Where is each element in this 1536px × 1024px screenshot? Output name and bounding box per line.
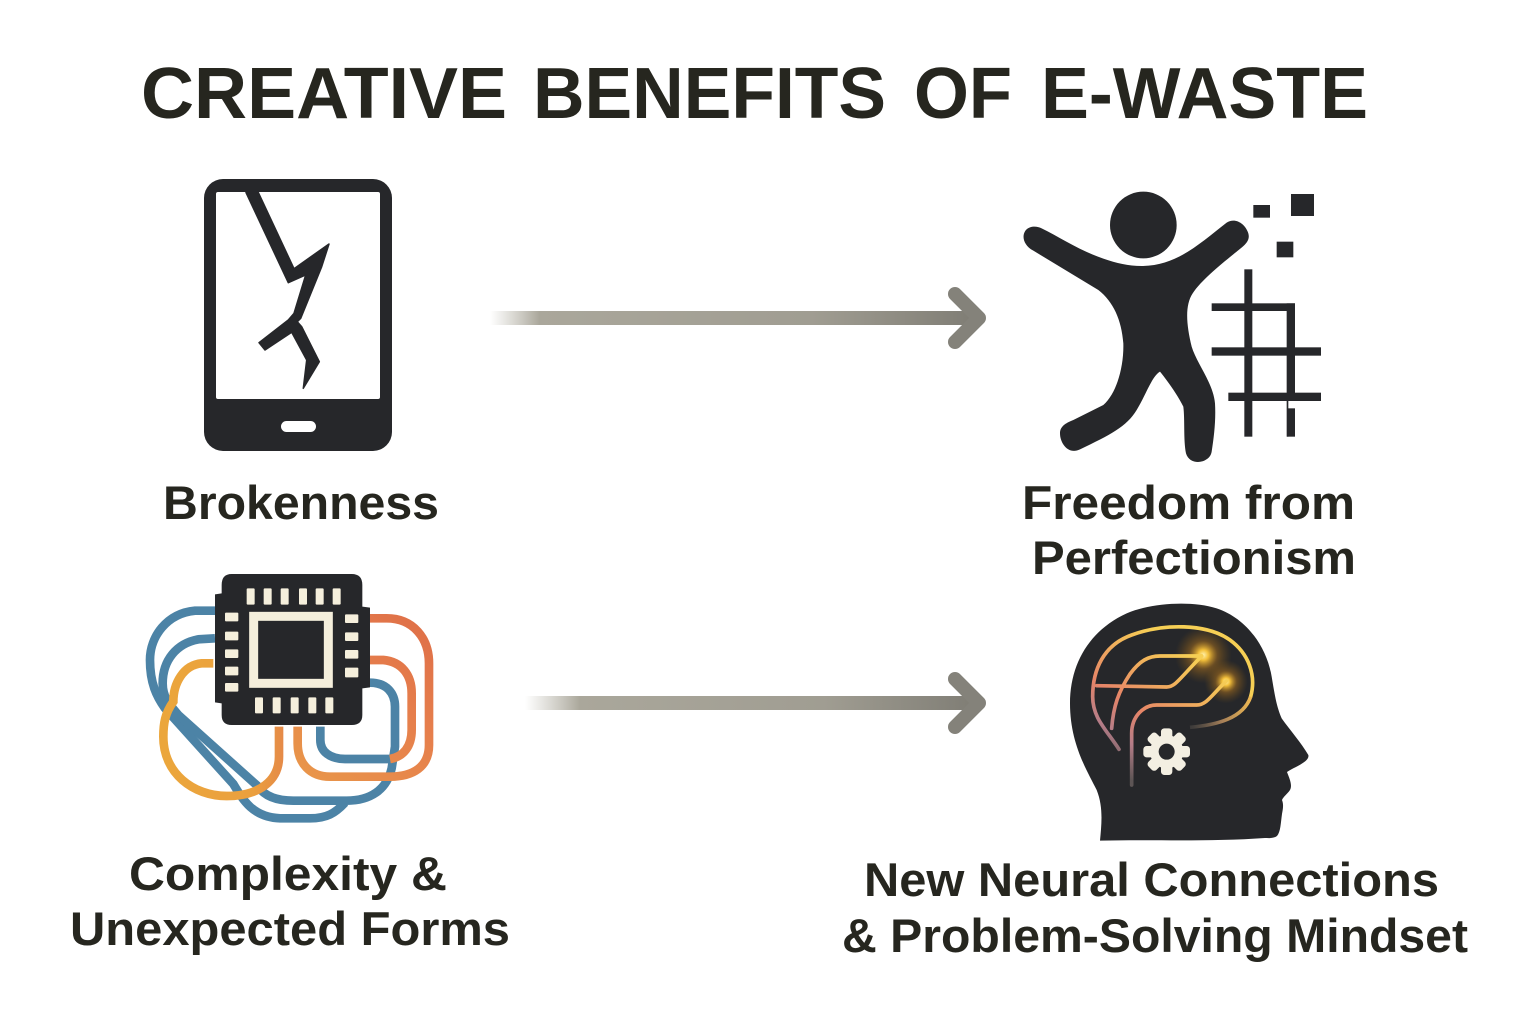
label: freedom from perfectionism: Perfectionism xyxy=(1032,531,1356,584)
title: OF xyxy=(914,54,1012,134)
label: brokenness: Brokenness xyxy=(163,476,439,529)
icon: chip with tangled wires xyxy=(150,574,429,818)
label: freedom from perfectionism: Freedom from xyxy=(1022,476,1355,529)
title: E-WASTE xyxy=(1041,54,1368,134)
title: BENEFITS xyxy=(533,54,886,134)
icon: gear xyxy=(1143,728,1190,775)
label: new neural connections and problem-solving mindset: New Neural Connections xyxy=(864,853,1439,906)
label: freedom from perfectionism xyxy=(1022,476,1356,584)
label: complexity and unexpected forms: Complexity & xyxy=(129,847,447,900)
title xyxy=(141,54,1368,134)
label: new neural connections and problem-solving mindset xyxy=(842,853,1468,962)
label: new neural connections and problem-solving mindset: & Problem-Solving Mindset xyxy=(842,909,1468,962)
label: complexity and unexpected forms: Unexpected Forms xyxy=(70,902,510,955)
arrow: complexity to neural connections xyxy=(525,679,979,727)
icon: jumping figure with grid xyxy=(1024,192,1321,462)
icon: head with neural connections xyxy=(1070,604,1308,841)
arrow: brokenness to freedom xyxy=(490,294,979,342)
title: CREATIVE xyxy=(141,54,507,134)
neural glow xyxy=(1175,627,1248,703)
label: complexity and unexpected forms xyxy=(70,847,510,955)
icon: broken phone xyxy=(204,179,392,451)
